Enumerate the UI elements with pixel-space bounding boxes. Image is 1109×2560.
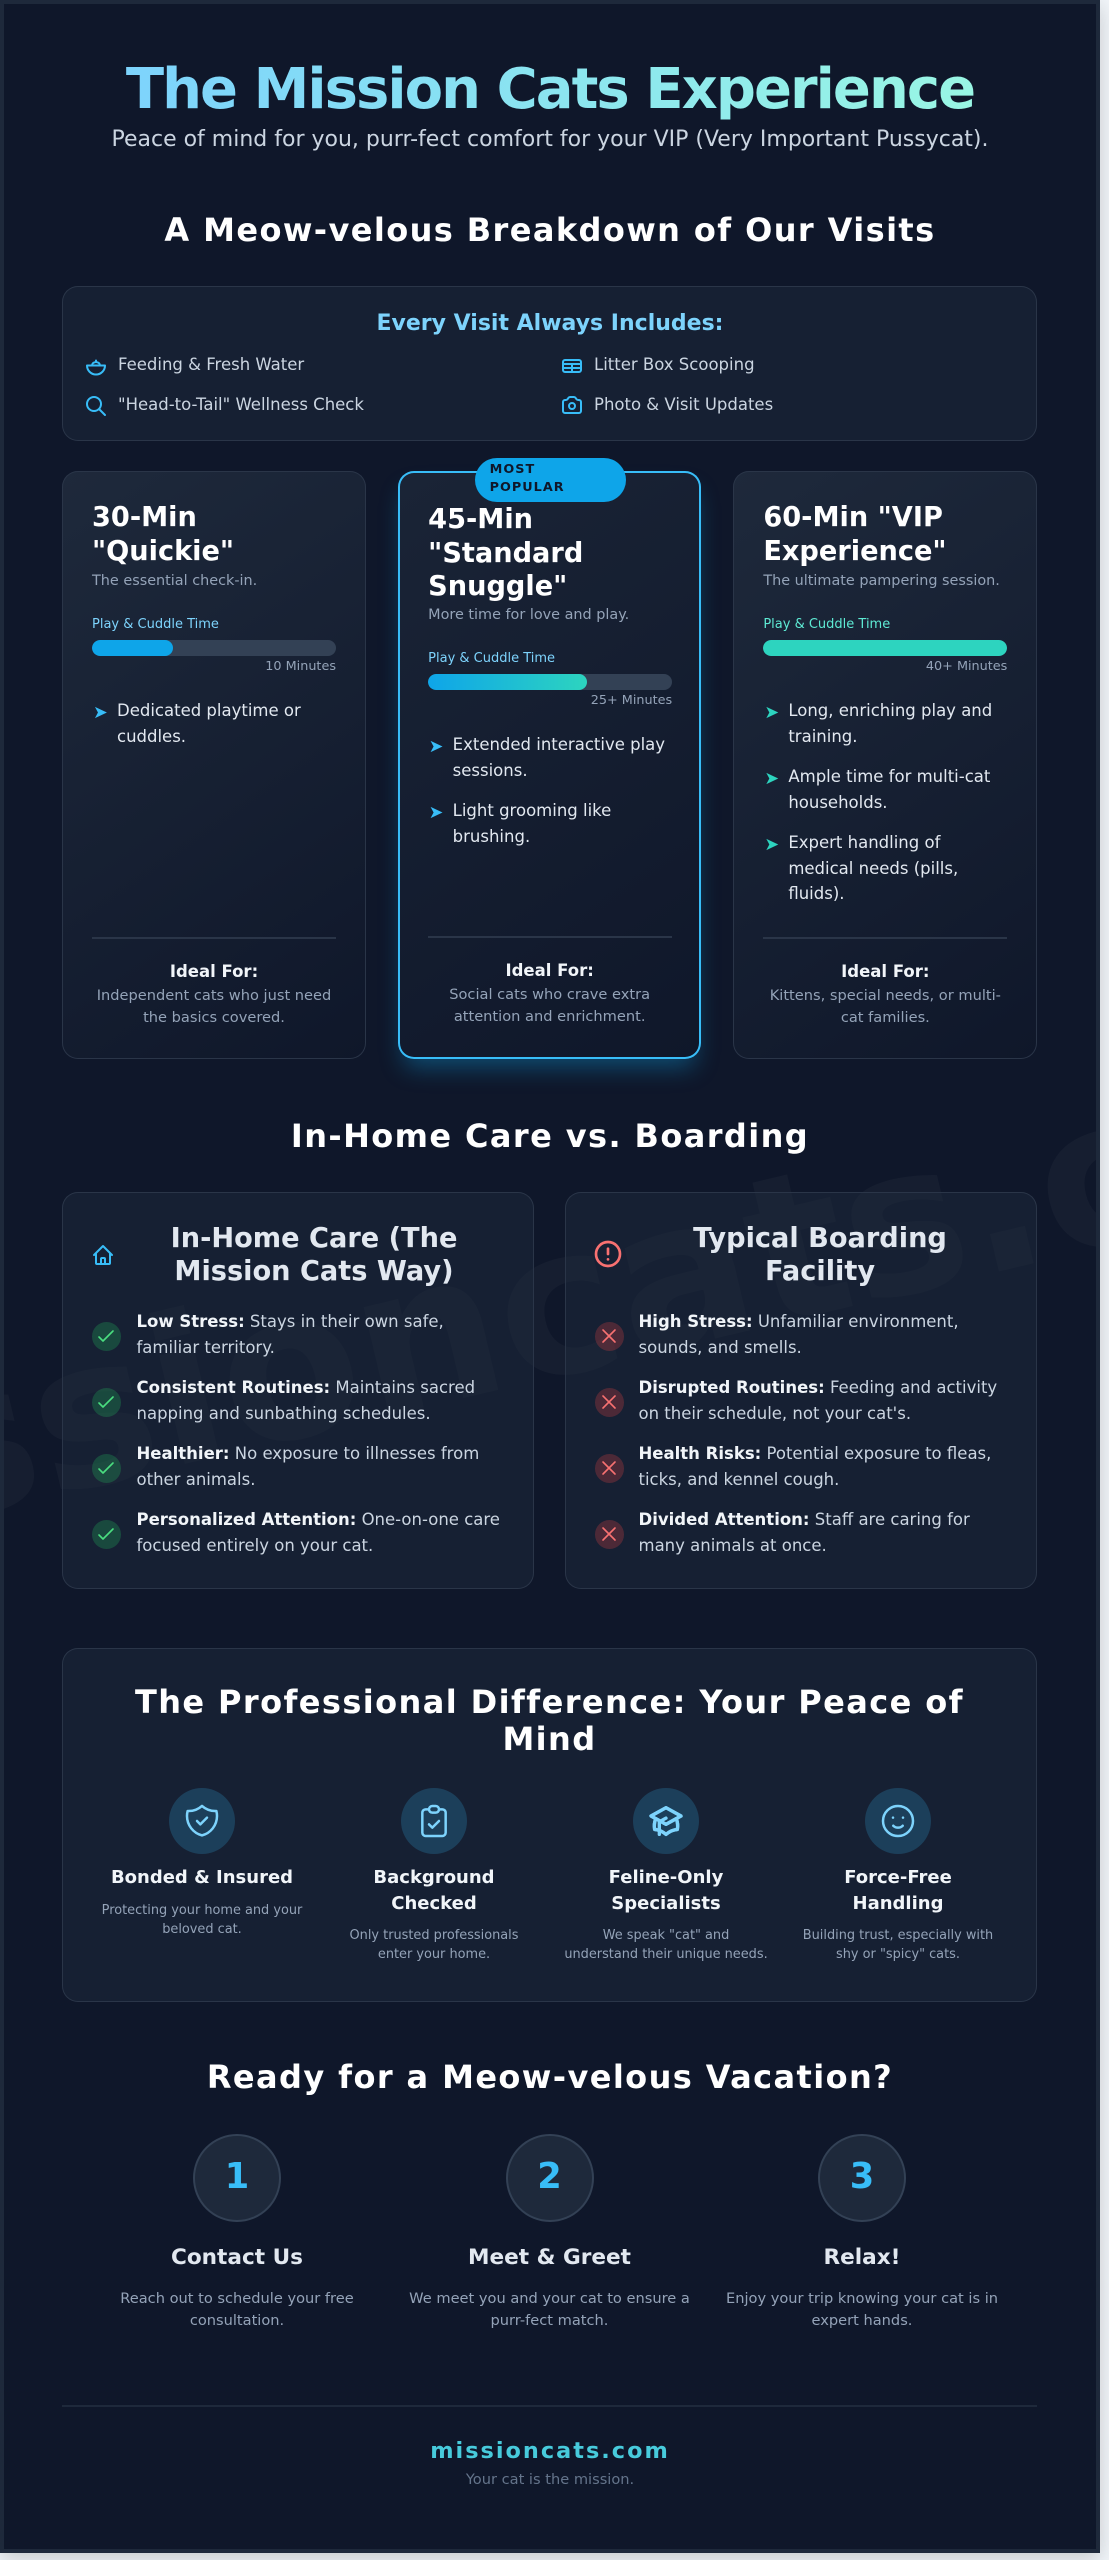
panel heading: Mind	[502, 1720, 597, 1758]
icon: camera	[562, 396, 582, 414]
step text	[404, 2288, 694, 2332]
feature text	[792, 1927, 1004, 1964]
icon: cross	[595, 1520, 624, 1549]
progress bar: 25+ minutes	[428, 674, 672, 690]
icon: cross	[595, 1388, 624, 1417]
panel: in-home care	[62, 1192, 534, 1589]
feature: background checked	[328, 1788, 540, 1978]
item: disrupted routines	[595, 1378, 997, 1423]
bullet text	[453, 801, 611, 846]
bullet text	[788, 767, 990, 812]
panel heading: Typical Boarding	[693, 1223, 947, 1254]
item text	[136, 1312, 444, 1357]
step text	[92, 2288, 382, 2332]
ideal for text	[449, 986, 650, 1025]
panel: every visit always includes	[62, 286, 1037, 441]
bullet text: fluids).	[788, 884, 845, 903]
bullet text: Expert handling of	[788, 833, 940, 852]
panel heading	[62, 1684, 1037, 1758]
badge: most popular: MOST	[490, 462, 535, 477]
bullet text	[453, 735, 665, 780]
ideal for text: the basics covered.	[143, 1009, 285, 1026]
bullet text: cuddles.	[117, 727, 186, 746]
icon: bowl	[86, 360, 106, 376]
ideal for text	[97, 987, 331, 1026]
icon: clipboard check	[400, 1788, 466, 1854]
feature title	[560, 1865, 772, 1917]
step text: We meet you and your cat to ensure a	[409, 2290, 690, 2307]
ideal for heading: Ideal For:	[170, 962, 258, 981]
feature title: Background	[373, 1867, 495, 1888]
include label: Feeding & Fresh Water	[118, 355, 304, 374]
step title: Meet & Greet	[468, 2245, 631, 2270]
panel heading: Facility	[765, 1256, 875, 1287]
feature text	[560, 1927, 772, 1964]
bullet text: Extended interactive play	[453, 735, 665, 754]
feature: feline-only specialists	[560, 1788, 772, 1978]
item text: Health Risks: Potential exposure to fleas,	[638, 1444, 991, 1463]
step number: 3	[850, 2156, 874, 2197]
card title: 30-Min	[92, 502, 197, 533]
step number	[506, 2134, 594, 2222]
item text: Disrupted Routines: Feeding and activity	[638, 1378, 997, 1397]
bullet text	[788, 701, 992, 746]
bullet arrow: ➤	[93, 703, 108, 723]
icon: smile	[864, 1788, 930, 1854]
card title	[428, 504, 583, 602]
ideal for text: attention and enrichment.	[454, 1008, 645, 1025]
feature: bonded and insured	[96, 1788, 308, 1978]
bullet text: brushing.	[453, 827, 530, 846]
card title: "Quickie"	[92, 536, 234, 567]
icon: check	[92, 1322, 121, 1351]
item text: Personalized Attention: One-on-one care	[136, 1510, 500, 1529]
item text	[638, 1312, 959, 1357]
panel: the professional difference	[62, 1648, 1037, 2002]
feature text: enter your home.	[378, 1946, 490, 1962]
feature title: Checked	[391, 1893, 477, 1914]
section heading: call to action: Ready for a Meow-velous Vacation?	[207, 2058, 893, 2096]
item text	[638, 1444, 991, 1489]
icon: cross	[595, 1454, 624, 1483]
step text: Enjoy your trip knowing your cat is in	[726, 2290, 998, 2307]
bar value: 40+ Minutes	[926, 659, 1007, 674]
feature title: Force-Free	[844, 1867, 952, 1888]
panel: typical boarding facility	[565, 1192, 1037, 1589]
item: divided attention	[595, 1510, 970, 1555]
icon: cross	[595, 1322, 624, 1351]
feature text: We speak "cat" and	[603, 1928, 729, 1943]
step text: expert hands.	[812, 2312, 912, 2329]
item text: on their schedule, not your cat's.	[638, 1404, 911, 1423]
item text: sounds, and smells.	[638, 1338, 802, 1357]
bullet arrow: ➤	[429, 737, 443, 757]
feature title	[792, 1865, 1004, 1917]
feature title: Bonded & Insured	[111, 1867, 293, 1888]
feature text: shy or "spicy" cats.	[836, 1946, 960, 1962]
bar label: Play & Cuddle Time	[92, 617, 219, 632]
card tagline: The essential check-in.	[92, 573, 257, 589]
icon: house	[93, 1245, 113, 1265]
card tagline: The ultimate pampering session.	[763, 573, 1000, 589]
item text: familiar territory.	[136, 1338, 275, 1357]
icon: shield check	[168, 1788, 234, 1854]
ideal for text: Kittens, special needs, or multi-	[770, 987, 1001, 1004]
step number: 2	[537, 2156, 562, 2197]
bullet arrow: ➤	[764, 769, 779, 789]
step text: Reach out to schedule your free	[120, 2290, 354, 2307]
card tagline: More time for love and play.	[428, 607, 629, 623]
icon: check	[92, 1520, 121, 1549]
feature title: Specialists	[611, 1893, 721, 1914]
include label: Litter Box Scooping	[594, 355, 755, 374]
bullet text: Long, enriching play and	[788, 701, 992, 720]
bullet text: Ample time for multi-cat	[788, 767, 990, 786]
item text: many animals at once.	[638, 1536, 827, 1555]
panel heading: In-Home Care (The	[171, 1223, 457, 1254]
item text: Consistent Routines: Maintains sacred	[136, 1378, 475, 1397]
item: health risks	[595, 1444, 991, 1489]
card title: Snuggle"	[428, 571, 567, 602]
bullet text: Light grooming like	[453, 801, 611, 820]
item text	[638, 1378, 997, 1423]
card: 60-minute VIP experience	[733, 471, 1037, 1059]
step number: 1	[225, 2156, 249, 2197]
include label: "Head-to-Tail" Wellness Check	[118, 395, 364, 414]
step text: purr-fect match.	[491, 2312, 608, 2329]
title: The Mission Cats Experience	[126, 57, 974, 122]
badge: most popular	[475, 458, 626, 502]
feature text: Only trusted professionals	[350, 1928, 518, 1943]
include: feeding and fresh water	[86, 355, 304, 376]
footer website: missioncats.com	[430, 2438, 670, 2464]
item text: High Stress: Unfamiliar environment,	[638, 1312, 959, 1331]
card title	[763, 502, 947, 567]
bullet arrow: ➤	[764, 835, 779, 855]
include label: Photo & Visit Updates	[594, 395, 773, 414]
section heading: visits breakdown: A Meow-velous Breakdown of Our Visits	[164, 211, 936, 249]
step number	[193, 2134, 281, 2222]
feature text: beloved cat.	[162, 1922, 242, 1936]
bar value: 10 Minutes	[265, 659, 336, 674]
step title: Contact Us	[171, 2245, 303, 2270]
card title: Experience"	[763, 536, 947, 567]
item text: other animals.	[136, 1470, 255, 1489]
panel heading	[171, 1223, 457, 1287]
feature title: Feline-Only	[609, 1867, 723, 1888]
badge: most popular: POPULAR	[490, 480, 565, 495]
includes heading: Every Visit Always Includes:	[377, 311, 723, 336]
feature title	[328, 1865, 540, 1917]
subtitle: Peace of mind for you, purr-fect comfort for your VIP (Very Important Pussycat).	[111, 127, 989, 152]
item text: Healthier: No exposure to illnesses from	[136, 1444, 479, 1463]
card title	[92, 502, 234, 567]
feature: force-free handling	[792, 1788, 1004, 1978]
icon: check	[92, 1388, 121, 1417]
panel heading	[693, 1223, 947, 1287]
bullet text: training.	[788, 727, 858, 746]
ideal for text	[770, 987, 1001, 1026]
ideal for text: Social cats who crave extra	[449, 986, 650, 1003]
bullet arrow: ➤	[764, 703, 779, 723]
step text: consultation.	[190, 2312, 284, 2329]
item text	[136, 1378, 475, 1423]
item: high stress	[595, 1312, 959, 1357]
icon: magnifier	[86, 396, 106, 416]
section heading: comparison: In-Home Care vs. Boarding	[291, 1117, 809, 1155]
item: healthier	[92, 1444, 479, 1489]
item: consistent routines	[92, 1378, 475, 1423]
progress bar: 40+ minutes	[763, 640, 1007, 656]
ideal for text: Independent cats who just need	[97, 987, 331, 1004]
bullet text: Dedicated playtime or	[117, 701, 301, 720]
item text: napping and sunbathing schedules.	[136, 1404, 431, 1423]
icon: graduation cap	[632, 1788, 698, 1854]
feature title: Handling	[853, 1893, 943, 1914]
item text	[136, 1510, 500, 1555]
feature text	[328, 1927, 540, 1964]
include: litter box	[562, 355, 755, 374]
item: low stress	[92, 1312, 444, 1357]
item text: Low Stress: Stays in their own safe,	[136, 1312, 444, 1331]
progress bar: 10 minutes	[92, 640, 336, 656]
bullet arrow: ➤	[429, 803, 443, 823]
bullet text	[117, 701, 301, 746]
bullet text: households.	[788, 793, 888, 812]
panel heading: Mission Cats Way)	[174, 1256, 454, 1287]
item: personalized attention	[92, 1510, 500, 1555]
bar value: 25+ Minutes	[591, 693, 672, 708]
step number	[818, 2134, 906, 2222]
card title: 45-Min	[428, 504, 533, 535]
include: photo updates	[562, 395, 773, 414]
item text	[638, 1510, 970, 1555]
bar label: Play & Cuddle Time	[428, 651, 555, 666]
step title: Relax!	[823, 2245, 901, 2270]
feature text: Protecting your home and your	[102, 1903, 302, 1918]
card title: 60-Min "VIP	[763, 502, 943, 533]
icon: litter tray	[562, 359, 582, 373]
item text	[136, 1444, 479, 1489]
panel heading: The Professional Difference: Your Peace of	[135, 1683, 964, 1721]
ideal for text: cat families.	[841, 1009, 930, 1026]
card: 30-minute quickie	[62, 471, 366, 1059]
item text: focused entirely on your cat.	[136, 1536, 373, 1555]
card: 45-minute standard snuggle (most popular)	[398, 471, 701, 1059]
ideal for heading: Ideal For:	[505, 961, 594, 980]
item text: ticks, and kennel cough.	[638, 1470, 839, 1489]
bullet text	[788, 833, 958, 903]
icon: warning circle	[594, 1240, 622, 1268]
item text: Divided Attention: Staff are caring for	[638, 1510, 970, 1529]
icon: check	[92, 1454, 121, 1483]
bullet text: medical needs (pills,	[788, 859, 958, 878]
step 1: contact us	[92, 2134, 382, 2334]
bar label: Play & Cuddle Time	[763, 617, 890, 632]
footer tagline: Your cat is the mission.	[466, 2471, 634, 2488]
feature text: understand their unique needs.	[564, 1946, 768, 1962]
step 3: relax	[717, 2134, 1007, 2334]
feature text	[96, 1902, 308, 1939]
step 2: meet and greet	[404, 2134, 694, 2334]
step text	[717, 2288, 1007, 2332]
ideal for heading: Ideal For:	[841, 962, 930, 981]
card title: "Standard	[428, 538, 583, 569]
include: wellness check	[86, 395, 364, 416]
bullet text: sessions.	[453, 761, 528, 780]
feature text: Building trust, especially with	[803, 1928, 993, 1943]
